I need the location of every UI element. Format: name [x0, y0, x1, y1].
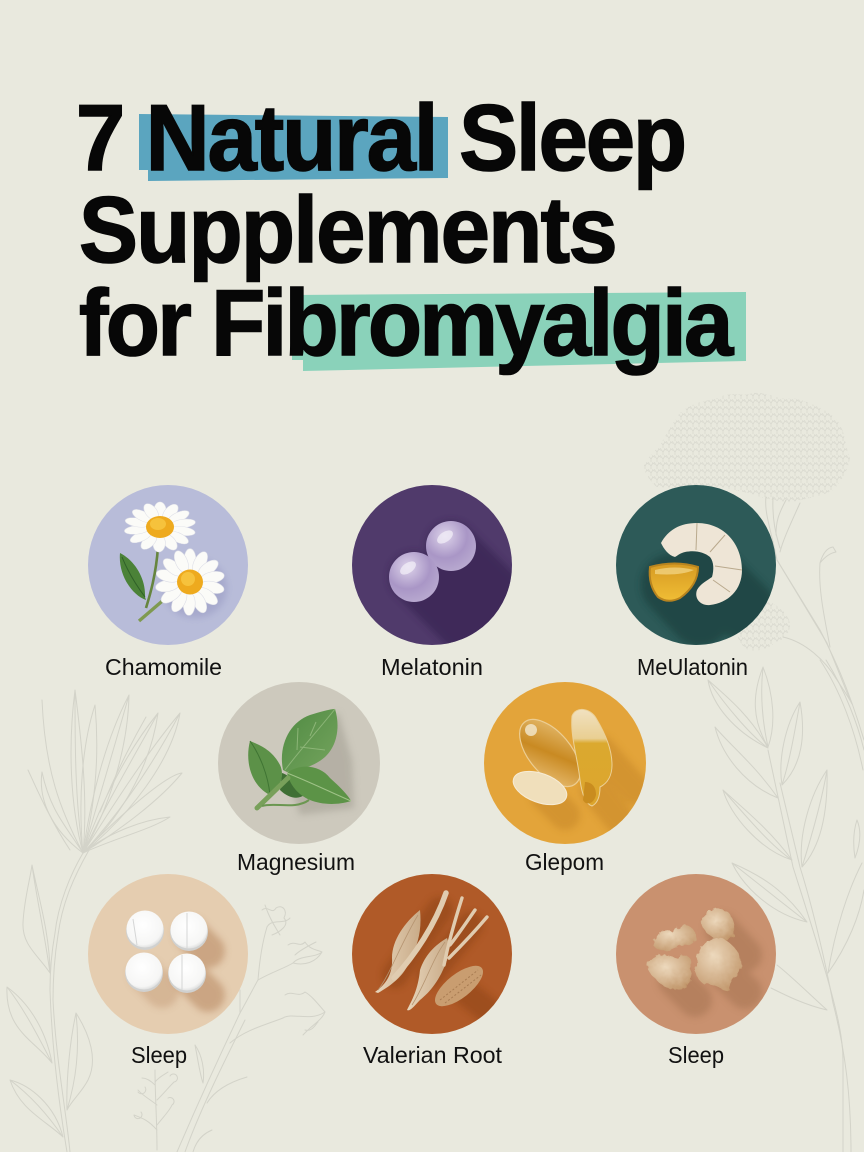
circle: purple — [352, 485, 512, 645]
label: MeUlatonin: MeUlatonin — [637, 654, 748, 680]
title highlight: Fibromyalgia — [292, 292, 746, 371]
coral tree top right — [643, 393, 864, 740]
circle: rust — [352, 874, 512, 1034]
label: Magnesium: Magnesium — [237, 849, 355, 875]
item: MeUlatonin — [616, 485, 776, 680]
title: for Fibromyalgia — [79, 271, 734, 376]
item: Chamomile — [88, 485, 248, 680]
right stem with leaves — [708, 660, 864, 1152]
title: 7 Natural Sleep — [76, 86, 687, 191]
label: Chamomile: Chamomile — [105, 654, 222, 680]
circle: terracotta — [616, 874, 776, 1034]
title — [76, 86, 734, 376]
item: Magnesium — [218, 682, 380, 875]
circle: amber — [484, 682, 646, 844]
title highlight: Natural — [139, 114, 448, 181]
label: Sleep (right): Sleep — [668, 1042, 724, 1068]
item: Valerian Root — [352, 874, 512, 1068]
item: Sleep tablets — [88, 874, 248, 1068]
label: Melatonin: Melatonin — [381, 654, 483, 680]
icon: white tablets — [125, 910, 208, 995]
item: Glepom — [484, 682, 646, 875]
icon: crescent tablet and oil capsule — [650, 523, 745, 615]
item: Sleep roots — [616, 874, 776, 1068]
circle: peach — [88, 874, 248, 1034]
item: Melatonin — [352, 485, 512, 675]
icon: softgel capsules — [508, 709, 635, 820]
icon: chamomile flowers — [120, 502, 227, 621]
title: Supplements — [79, 178, 618, 283]
circle: dark teal — [616, 485, 776, 645]
background botanical line art — [7, 393, 864, 1152]
icon: melatonin spheres — [388, 520, 512, 644]
icon: valerian root pieces — [375, 893, 490, 1013]
circle: warm grey — [218, 682, 380, 844]
label: Glepom: Glepom — [525, 849, 604, 875]
circle: lavender — [88, 485, 248, 645]
label: Sleep (left): Sleep — [131, 1042, 187, 1068]
middle flowering sprig — [134, 905, 325, 1152]
small tree behind teal circle — [736, 601, 852, 704]
icon: root lumps — [648, 909, 745, 1000]
icon: green leaves — [248, 709, 354, 815]
left plume plant — [7, 690, 182, 1152]
label: Valerian Root: Valerian Root — [363, 1042, 503, 1068]
